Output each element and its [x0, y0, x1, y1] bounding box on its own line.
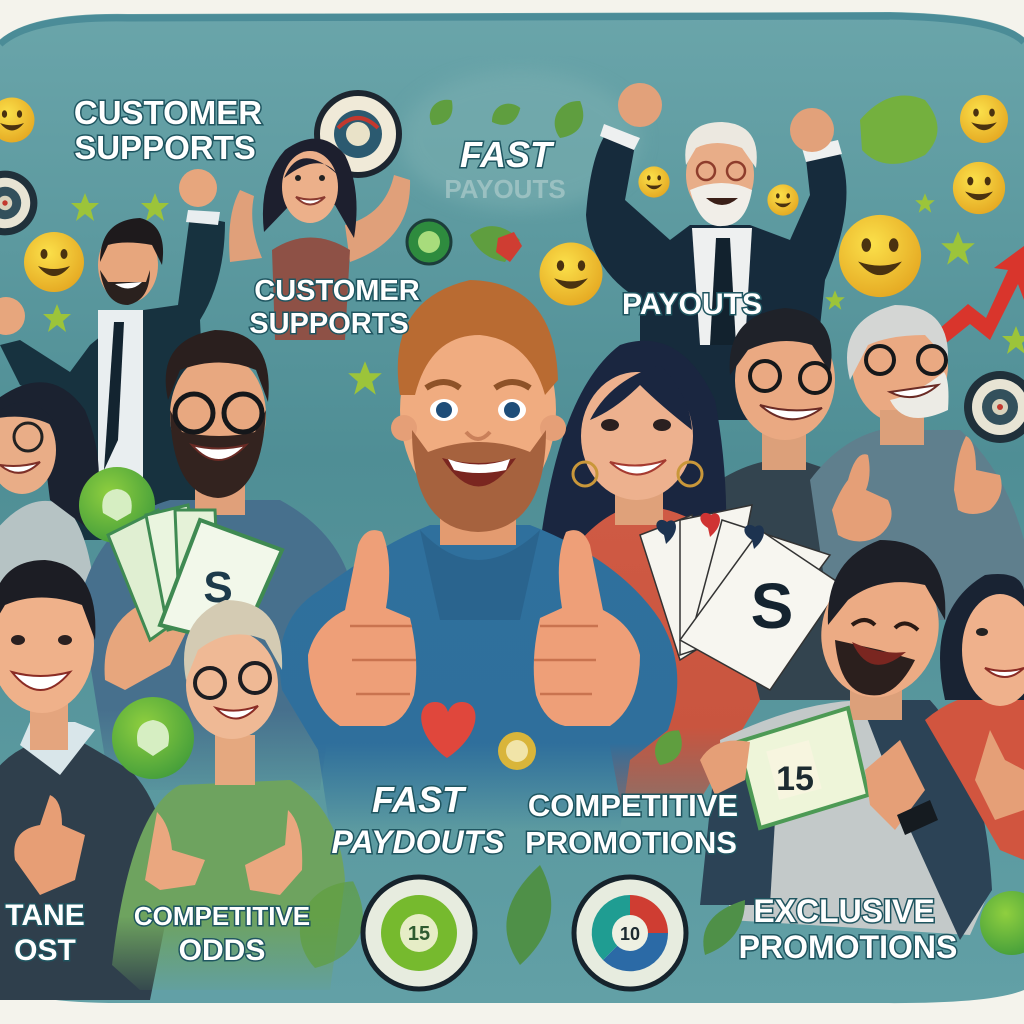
background glow [400, 70, 640, 210]
heading: competitive odds: COMPETITIVE [134, 901, 310, 931]
icon: fanned playing cards: S [751, 570, 793, 642]
icon: banknote held: 15 [776, 760, 814, 798]
person: woman far left [0, 382, 99, 600]
heading: cropped lower left: OST [14, 934, 76, 967]
icon: small leaf [650, 725, 687, 770]
icon: gold coin [498, 732, 536, 770]
heading: fast payouts top: PAYOUTS [444, 174, 566, 204]
heading: exclusive promotions: PROMOTIONS [739, 929, 957, 965]
person: woman right of centre [540, 341, 760, 800]
icons: smileys [0, 95, 1008, 306]
heading: customer supports centre: SUPPORTS [249, 308, 409, 340]
person: man with glasses right [720, 308, 880, 700]
heading: competitive odds: ODDS [179, 934, 265, 967]
person: woman upper centre [229, 139, 410, 340]
heading: cropped lower left: TANE [5, 899, 85, 932]
icon: green badge left [79, 467, 155, 543]
heading: competitive promotions: PROMOTIONS [525, 825, 737, 860]
icon: fanned banknotes left: S [203, 563, 233, 612]
icon: fanned banknotes left [108, 505, 282, 645]
icon: plant leaves bottom [290, 865, 745, 977]
person: young man lower left [0, 560, 170, 1000]
icon: dartboard top left [0, 171, 37, 235]
icon: dial multicolour [574, 877, 686, 989]
icon: dial multicolour: 10 [620, 924, 640, 944]
person: old man right [810, 305, 1024, 620]
person: centre man [280, 280, 677, 830]
person: glasses man left [80, 330, 350, 790]
person: woman far right [925, 574, 1024, 860]
icon: hands holding banknote [700, 740, 938, 835]
icon: green coin [407, 220, 451, 264]
heading: customer supports top left: CUSTOMER [74, 94, 262, 131]
icon: badge top [317, 93, 399, 175]
person: old man in suit upper right [586, 83, 846, 420]
icon: dartboard right [964, 371, 1024, 443]
heading: competitive promotions: COMPETITIVE [528, 788, 738, 823]
person: laughing man lower right [700, 540, 992, 940]
heading: exclusive promotions: EXCLUSIVE [753, 893, 935, 929]
icon: heart [421, 702, 476, 758]
icon: green ball right [980, 891, 1024, 955]
icon: red growth arrow [932, 246, 1024, 348]
icon: dial green: 15 [408, 923, 430, 945]
heading: fast payouts top: FAST [460, 134, 555, 175]
person: blonde woman [112, 600, 345, 990]
heading: payouts: PAYOUTS [622, 288, 762, 321]
panel dark edge [0, 16, 1024, 44]
icon: fanned playing cards [640, 505, 842, 690]
icons: stars [43, 193, 1024, 395]
icon: banknote held [738, 708, 868, 828]
icon: green badge lower left [112, 697, 194, 779]
heading: customer supports centre: CUSTOMER [254, 275, 420, 307]
heading: customer supports top left: SUPPORTS [74, 129, 256, 166]
heading: fast paydouts: PAYDOUTS [331, 824, 505, 860]
person: man in suit upper left [0, 169, 225, 540]
icon: left thumbs up [308, 530, 416, 726]
heading: fast paydouts: FAST [372, 779, 467, 820]
heading: fast payouts top [444, 134, 566, 204]
icon: floating leaves [425, 94, 938, 262]
icon: dial green [363, 877, 475, 989]
icon: right thumbs up [534, 530, 640, 726]
